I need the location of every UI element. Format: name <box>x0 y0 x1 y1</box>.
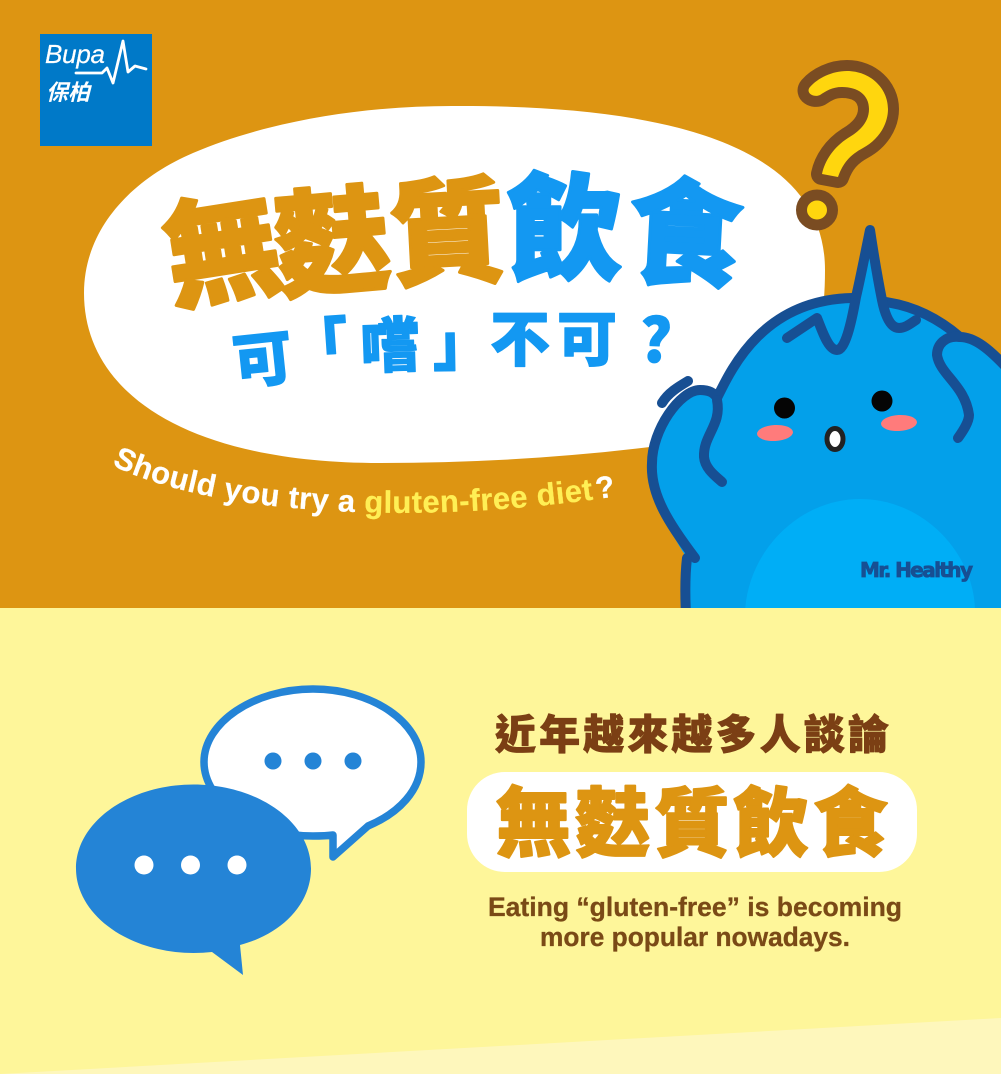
title: gluten-free diet: 食 <box>624 141 747 313</box>
mascot body <box>656 258 1001 608</box>
cheeks <box>757 414 917 442</box>
English description: more popular nowadays. <box>540 922 850 952</box>
white chat bubble <box>204 689 421 857</box>
Bupa logo: 保柏 <box>46 80 92 105</box>
top orange panel <box>0 0 1001 608</box>
subtitle: can you taste it: ? <box>638 292 673 381</box>
subtitle: can you taste it: 嚐 <box>359 297 422 386</box>
mascot outline <box>652 298 852 558</box>
question mark icon <box>802 71 888 225</box>
subtitle: can you taste it <box>228 292 673 402</box>
mascot right arm crease <box>937 337 969 438</box>
highlighted term box: 無麩質飲食 <box>496 763 888 872</box>
mascot left arm crease <box>704 400 722 482</box>
title: gluten-free diet <box>152 138 747 335</box>
English description <box>488 892 902 952</box>
subtitle: can you taste it: 可 <box>557 292 617 379</box>
curved English subtitle: Should you try a gluten-free diet? <box>114 448 612 520</box>
subtitle: can you taste it: 「 <box>285 297 351 388</box>
Bupa logo <box>40 34 152 146</box>
mascot left side <box>685 558 687 615</box>
heading: more people discussing: 近年越來越多人談論 <box>495 701 889 761</box>
title: gluten-free diet: 質 <box>386 139 509 311</box>
mouth <box>827 428 843 450</box>
Bupa logo: Bupa <box>45 39 105 69</box>
white speech bubble behind title <box>84 106 825 463</box>
pale footer wedge <box>0 1018 1001 1074</box>
chat bubbles icon <box>76 689 421 975</box>
subtitle: can you taste it: 」 <box>432 295 493 384</box>
mascot head right <box>885 302 1001 367</box>
eyes <box>774 390 892 418</box>
subtitle: can you taste it: 不 <box>490 292 550 379</box>
blue bubble dots <box>134 856 246 874</box>
blue chat bubble <box>76 784 311 975</box>
subtitle: can you taste it: 可 <box>228 309 297 402</box>
motion mark <box>662 381 688 403</box>
mascot name: Mr. Healthy <box>860 558 973 582</box>
title: gluten-free diet: 飲 <box>507 138 623 304</box>
title: gluten-free diet: 麩 <box>267 147 396 323</box>
title: gluten-free diet: 無 <box>152 153 291 335</box>
lower yellow panel <box>0 608 1001 1074</box>
English description: Eating “gluten-free” is becoming <box>488 892 902 922</box>
mascot belly <box>745 499 975 612</box>
mascot horn and fringe <box>787 230 916 350</box>
white bubble dots <box>264 752 362 770</box>
Mr. Healthy mascot <box>652 226 1001 615</box>
